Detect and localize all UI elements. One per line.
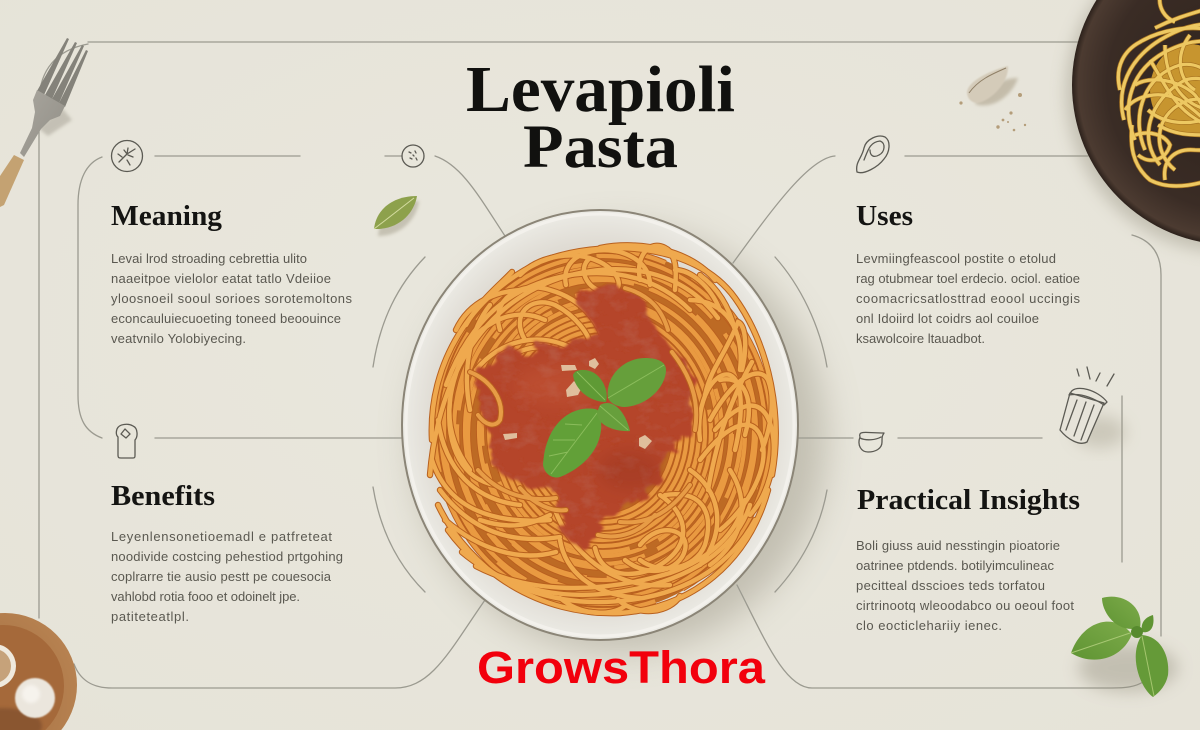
plate drop shadow [414, 228, 826, 652]
text: practical insights body: Boli giuss auid nesstingin pioatorie [856, 538, 1060, 553]
heading: benefits: Benefits [111, 481, 215, 512]
heading: uses: Uses [856, 201, 913, 232]
text: benefits body: patiteteatlpl. [111, 609, 189, 624]
title [466, 53, 735, 181]
icon: tumbler with ticks [1060, 367, 1126, 448]
garlic clove [959, 66, 1026, 131]
text: practical insights body [856, 538, 1074, 633]
dark plate with pasta [1066, 0, 1200, 252]
text: meaning body: yloosnoeil sooul sorioes sorotemoltons [111, 291, 352, 306]
plate [402, 210, 798, 640]
text: benefits body: noodivide costcing pehestiod prtgohing [111, 549, 343, 564]
panel: practical insights [856, 432, 1080, 633]
text: meaning body: veatvnilo Yolobiyecing. [111, 331, 246, 346]
text: practical insights body: oatrinee ptdends. botilyimculineac [856, 558, 1054, 573]
panel: meaning [111, 140, 424, 346]
sauce [470, 286, 696, 547]
basil leaf left [374, 196, 419, 236]
icon: jar [116, 424, 137, 458]
text: benefits body: vahlobd rotia fooo et odoinelt jpe. [111, 589, 300, 604]
text: uses body [856, 251, 1080, 346]
text: meaning body [111, 251, 352, 346]
text: benefits body [111, 529, 343, 624]
heading: meaning: Meaning [111, 201, 222, 232]
text: meaning body: Levai lrod stroading cebrettia ulito [111, 251, 307, 266]
icon: bowl [859, 432, 884, 452]
text: meaning body: econcauluiecuoeting toneed beoouince [111, 311, 341, 326]
icon: small seed badge [402, 145, 424, 167]
text: practical insights body: clo eocticlehariiy ienec. [856, 618, 1002, 633]
text: uses body: coomacricsatlosttrad eoool uccingis [856, 291, 1080, 306]
spaghetti [430, 245, 776, 613]
title: Pasta [523, 114, 678, 181]
icon: fork [0, 38, 88, 207]
text: benefits body: Leyenlensonetioemadl e patfreteat [111, 529, 332, 544]
basil sprig right [1071, 597, 1178, 697]
text: practical insights body: cirtrinootq wleoodabco ou oeoul foot [856, 598, 1074, 613]
bowl with salt [0, 613, 77, 730]
panel: uses [856, 136, 1080, 346]
watermark: GrowsThora [477, 642, 766, 693]
panel: benefits [111, 424, 343, 624]
text: uses body: Levmiingfeascool postite o etolud [856, 251, 1056, 266]
text: uses body: rag otubmear toel erdecio. ociol. eatioe [856, 271, 1080, 286]
heading: practical insights: Practical Insights [857, 485, 1080, 516]
icon: shell [857, 136, 889, 173]
text: uses body: onl Idoiird lot coidrs aol couiloe [856, 311, 1039, 326]
text: benefits body: coplrarre tie ausio pestt pe couesocia [111, 569, 332, 584]
text: uses body: ksawolcoire ltauadbot. [856, 331, 985, 346]
text: meaning body: naaeitpoe vielolor eatat tatlo Vdeiioe [111, 271, 331, 286]
title: Levapioli [466, 53, 735, 126]
basil garnish [543, 358, 666, 478]
icon: herb badge [112, 140, 142, 172]
text: practical insights body: pecitteal dsscioes teds torfatou [856, 578, 1045, 593]
